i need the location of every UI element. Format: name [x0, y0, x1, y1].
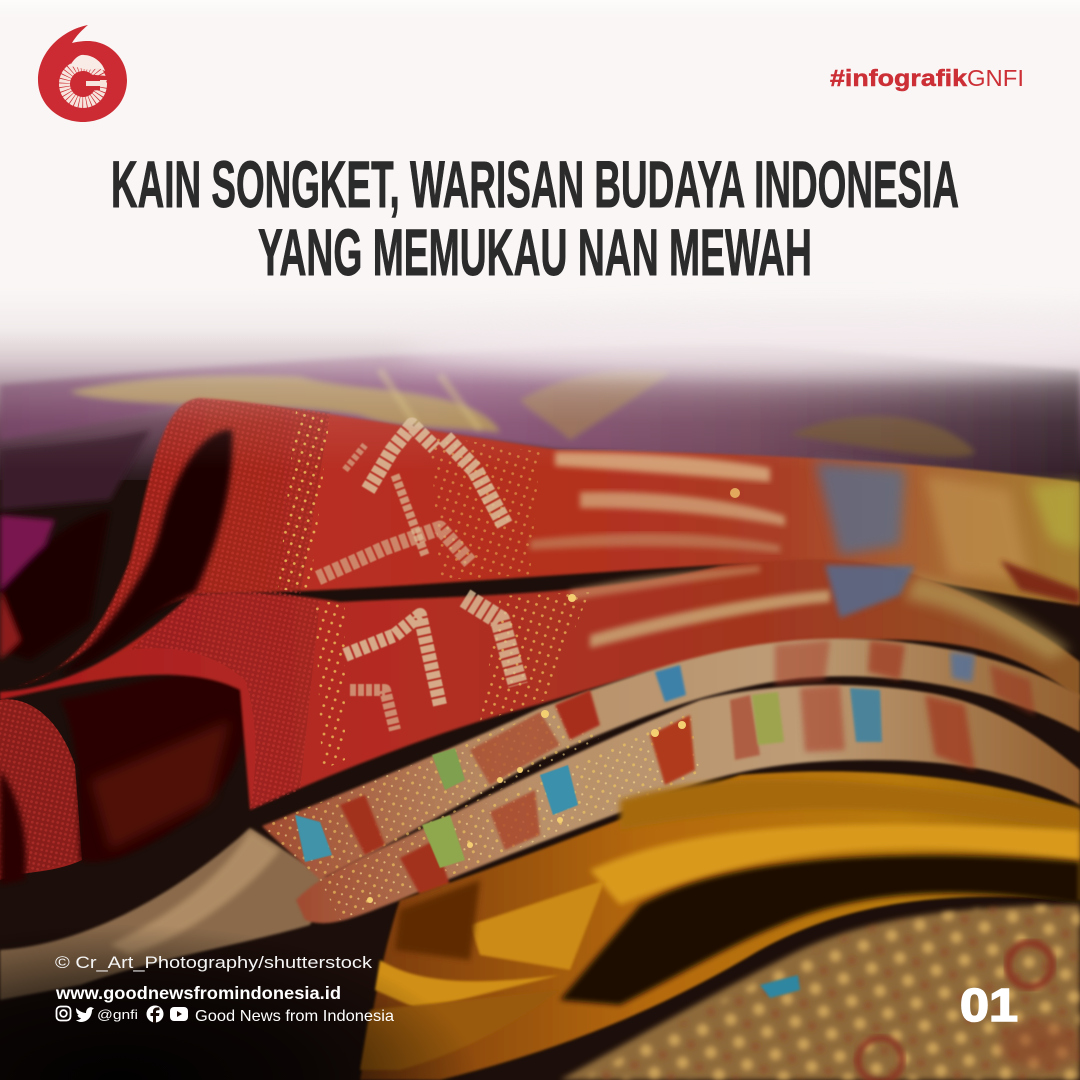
icon: instagram — [56, 1006, 70, 1020]
icon: twitter — [76, 1007, 94, 1022]
icon: youtube — [170, 1007, 188, 1021]
icon: facebook — [146, 1006, 164, 1023]
back purple songket cloth — [0, 345, 1080, 510]
fold opening shadow — [60, 430, 232, 676]
pale haze over right of purple cloth — [400, 313, 1080, 377]
fourth stripe band — [296, 685, 1080, 923]
logo emblem: eagle G — [64, 55, 107, 102]
woven gold and cream motif, second fold — [315, 565, 1070, 770]
hashtag: #infografik — [830, 65, 967, 91]
far left dark magenta fold — [0, 510, 110, 660]
lower left red fold and dark interior — [0, 673, 251, 885]
woven gold and cream motif, top fold — [278, 410, 1080, 605]
hashtag: GNFI — [967, 65, 1024, 91]
page name: Good News from Indonesia — [195, 1008, 394, 1025]
title — [111, 147, 959, 289]
social row — [56, 1006, 394, 1025]
photo credit: © Cr_Art_Photography/shutterstock — [55, 953, 373, 972]
beige left fold corner — [0, 828, 330, 1000]
hashtag — [830, 65, 1024, 91]
bottom left dark vignette — [0, 820, 600, 1080]
scattered gold sparkles — [367, 488, 740, 903]
website url: www.goodnewsfromindonesia.id — [55, 983, 341, 1003]
orange silk layers — [360, 771, 1080, 1080]
third stripe band — [262, 639, 1080, 880]
handle: @gnfi — [97, 1007, 138, 1022]
top red fold — [0, 398, 1080, 690]
bottom right patterned songket — [560, 905, 1080, 1080]
logo: red GNFI six mark — [38, 25, 127, 122]
top white fade — [0, 0, 1080, 470]
page number: 01 — [960, 979, 1018, 1031]
second red fold — [0, 559, 1080, 810]
